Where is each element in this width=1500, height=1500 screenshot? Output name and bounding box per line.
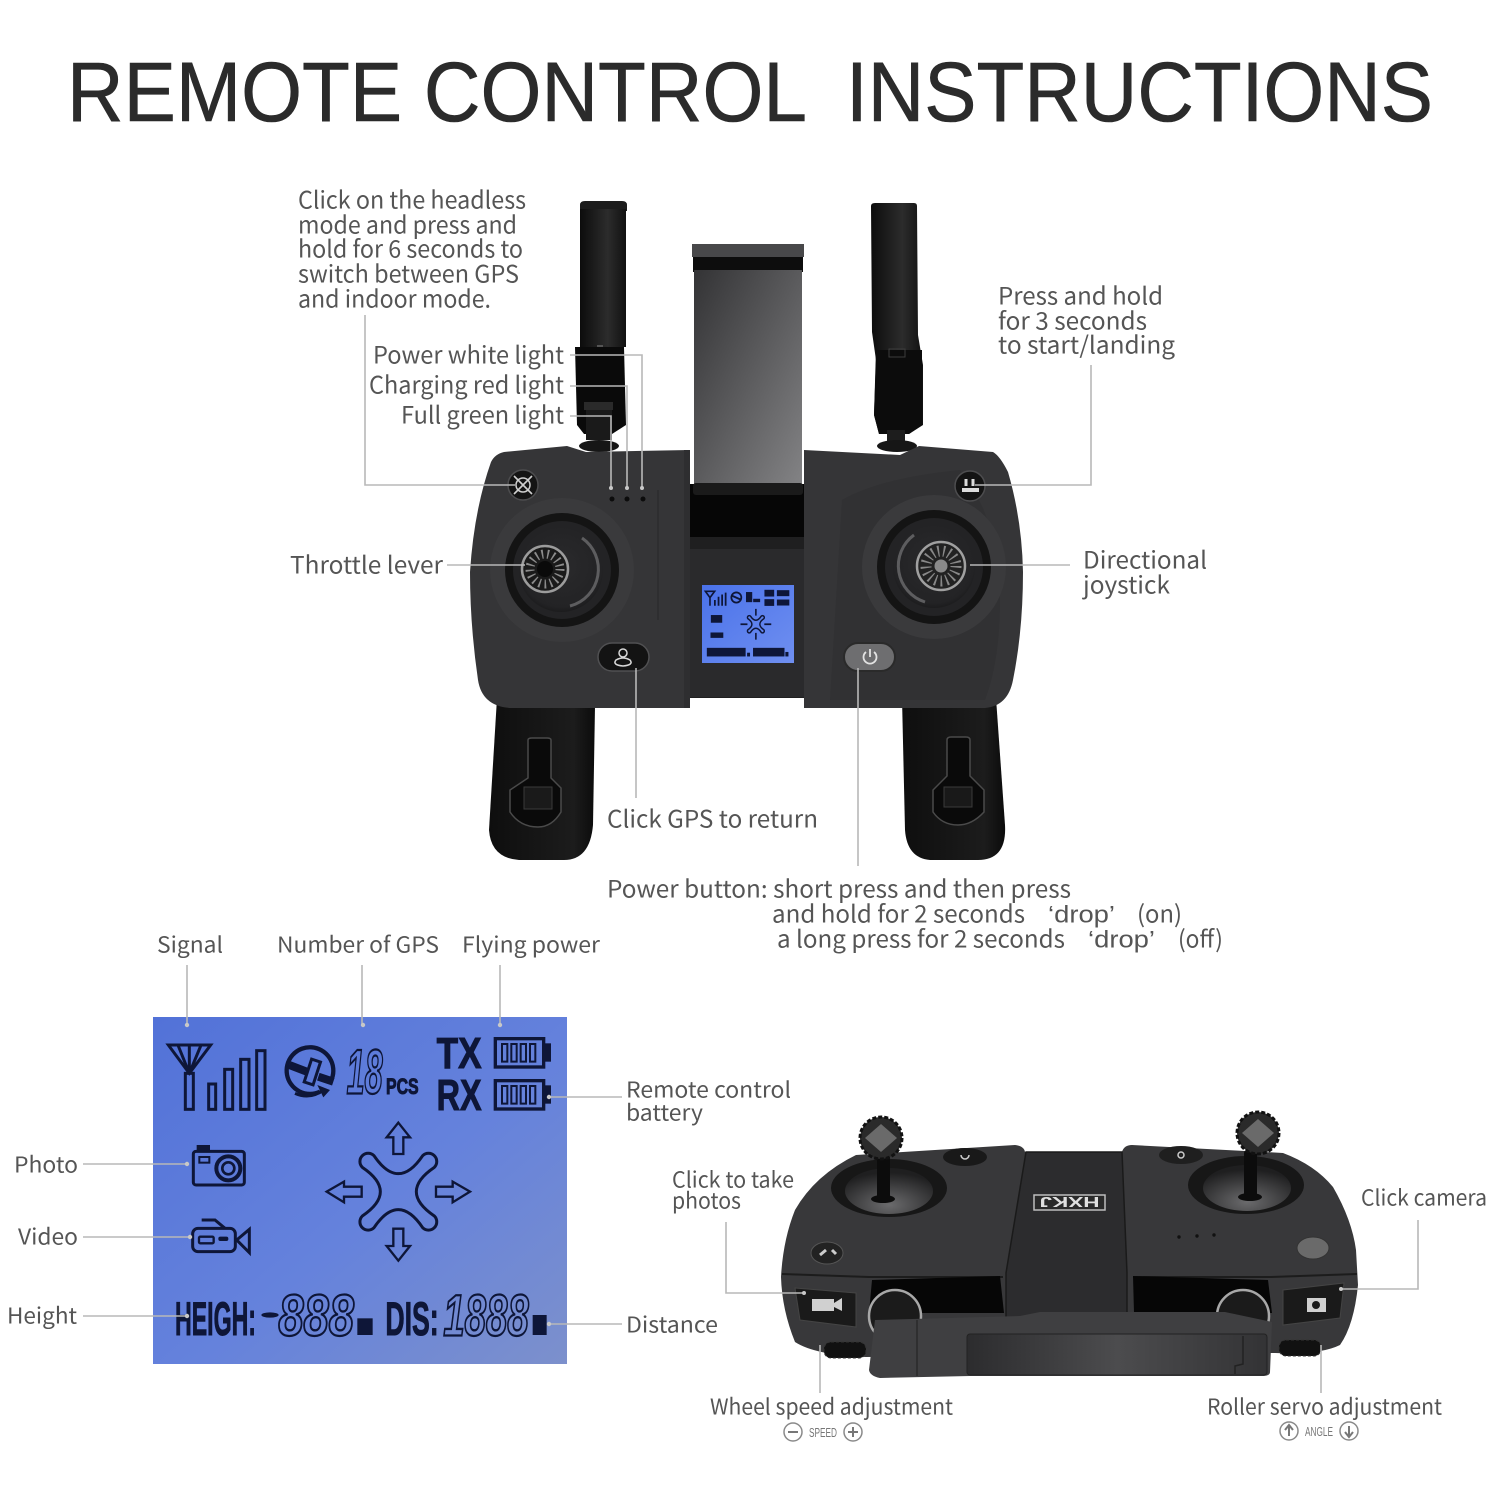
title: REMOTE CONTROL [67, 45, 807, 139]
label: power button: a long press for 2 seconds [777, 920, 1065, 955]
icon: video camera [193, 1220, 249, 1253]
label: directional joystick: joystick [1081, 566, 1170, 601]
TX label: TX [437, 1030, 482, 1078]
label: indicator lights: Full green light [401, 396, 564, 431]
GPS return button [598, 643, 649, 671]
label: distance: Distance [626, 1308, 718, 1340]
left antenna [575, 201, 627, 452]
label: GPS return: Click GPS to return [607, 800, 818, 835]
roller wheels [824, 1340, 1321, 1358]
ledge shadow [782, 1274, 1357, 1277]
folded phone holder [869, 1312, 1272, 1378]
label: power button [607, 870, 1223, 955]
number of GPS digits: 18 [347, 1037, 383, 1107]
RX label: RX [437, 1072, 482, 1120]
label: indicator lights: Power white light [373, 336, 564, 371]
label: directional joystick [1081, 541, 1207, 601]
left grip [489, 698, 595, 860]
label: headless mode: hold for 6 seconds to [298, 230, 523, 265]
label: power button: (on) [1137, 895, 1182, 930]
label: start landing: for 3 seconds [998, 302, 1147, 337]
height readout: 888 [278, 1283, 354, 1348]
label: headless mode: Click on the headless [298, 181, 526, 216]
right grip [902, 698, 1005, 860]
right joystick [1188, 1112, 1304, 1214]
throttle lever [490, 498, 634, 642]
label: power button: Power button: short press and then press [607, 870, 1071, 905]
label: remote control battery [626, 1073, 791, 1128]
title: INSTRUCTIONS [846, 45, 1433, 139]
label: signal: Signal [157, 928, 223, 960]
icon: GPS satellite [287, 1047, 333, 1097]
label: click camera: Click camera [1361, 1181, 1487, 1213]
icon: signal [168, 1045, 265, 1109]
power button [844, 643, 895, 671]
photo button tile [795, 1288, 856, 1327]
icon: drone with direction arrows [327, 1123, 470, 1261]
speed legend: SPEED [809, 1425, 837, 1440]
label: power button: (off) [1178, 920, 1223, 955]
distance readout: 1888 [443, 1283, 529, 1348]
hinge wheels [869, 1290, 1269, 1342]
label: headless mode [298, 181, 526, 315]
label: throttle lever: Throttle lever [290, 546, 444, 581]
leader lines for main controller [365, 315, 1091, 866]
label: click to take photos: photos [672, 1184, 741, 1216]
body [781, 1145, 1358, 1357]
label: headless mode: and indoor mode. [298, 280, 491, 315]
label: start landing: Press and hold [998, 277, 1163, 312]
label: indicator lights: Charging red light [369, 366, 564, 401]
label: click to take photos [672, 1163, 794, 1216]
takeoff landing button [955, 471, 985, 501]
label: headless mode: mode and press and [298, 206, 517, 241]
label: directional joystick: Directional [1083, 541, 1207, 576]
leader lines for LCD [83, 965, 622, 1326]
height readout [175, 1283, 373, 1348]
left joystick [831, 1117, 947, 1217]
title [67, 45, 1433, 139]
distance readout [385, 1283, 547, 1348]
icon: RX battery [495, 1081, 551, 1109]
right wing body [804, 446, 1023, 708]
phone holder [692, 244, 804, 486]
label: roller servo adjustment: Roller servo adjustment [1207, 1390, 1442, 1422]
top buttons [943, 1146, 1203, 1166]
label: click to take photos: Click to take [672, 1163, 794, 1195]
label: video: Video [18, 1220, 78, 1252]
small LCD screen [702, 585, 794, 663]
label: remote control battery: Remote control [626, 1073, 791, 1105]
PCS label: PCS [386, 1074, 419, 1099]
side buttons and LEDs [811, 1233, 1329, 1264]
label: number of GPS: Number of GPS [277, 928, 439, 960]
right antenna [871, 203, 923, 452]
label: indicator lights [369, 336, 564, 431]
centre body [690, 483, 804, 698]
label: wheel speed adjustment: Wheel speed adjustment [710, 1390, 953, 1422]
label: start landing [998, 277, 1175, 361]
label: power button: ‘drop’ [1088, 927, 1155, 954]
label: photo: Photo [14, 1148, 78, 1180]
label: headless mode: switch between GPS [298, 255, 519, 290]
leader lines for folded controller [726, 1220, 1418, 1393]
distance readout: DIS: [385, 1293, 439, 1346]
icon: TX battery [495, 1039, 551, 1067]
angle legend: ANGLE [1305, 1424, 1333, 1439]
left wing body [470, 446, 690, 708]
label: remote control battery: battery [626, 1096, 704, 1128]
folded remote controller illustration [781, 1112, 1358, 1378]
headless button [508, 470, 538, 500]
label: power button: ‘drop’ [1048, 902, 1115, 929]
label: flying power: Flying power [462, 928, 600, 960]
centre panel [1006, 1152, 1127, 1318]
directional joystick [862, 495, 1006, 639]
black slots [869, 1276, 1272, 1313]
icon: photo camera [193, 1145, 244, 1185]
LCD panel [153, 1017, 567, 1364]
speed legend [784, 1423, 862, 1441]
logo badge: HXKJ [1040, 1193, 1100, 1210]
height readout: HEIGH: [175, 1293, 256, 1346]
status lights [610, 496, 646, 502]
camera button tile [1283, 1283, 1344, 1325]
main remote controller illustration [470, 201, 1023, 860]
logo badge [1034, 1193, 1105, 1210]
label: height: Height [7, 1299, 77, 1331]
label: power button: and hold for 2 seconds [772, 895, 1025, 930]
angle legend [1280, 1422, 1358, 1440]
label: start landing: to start/landing [998, 326, 1175, 361]
